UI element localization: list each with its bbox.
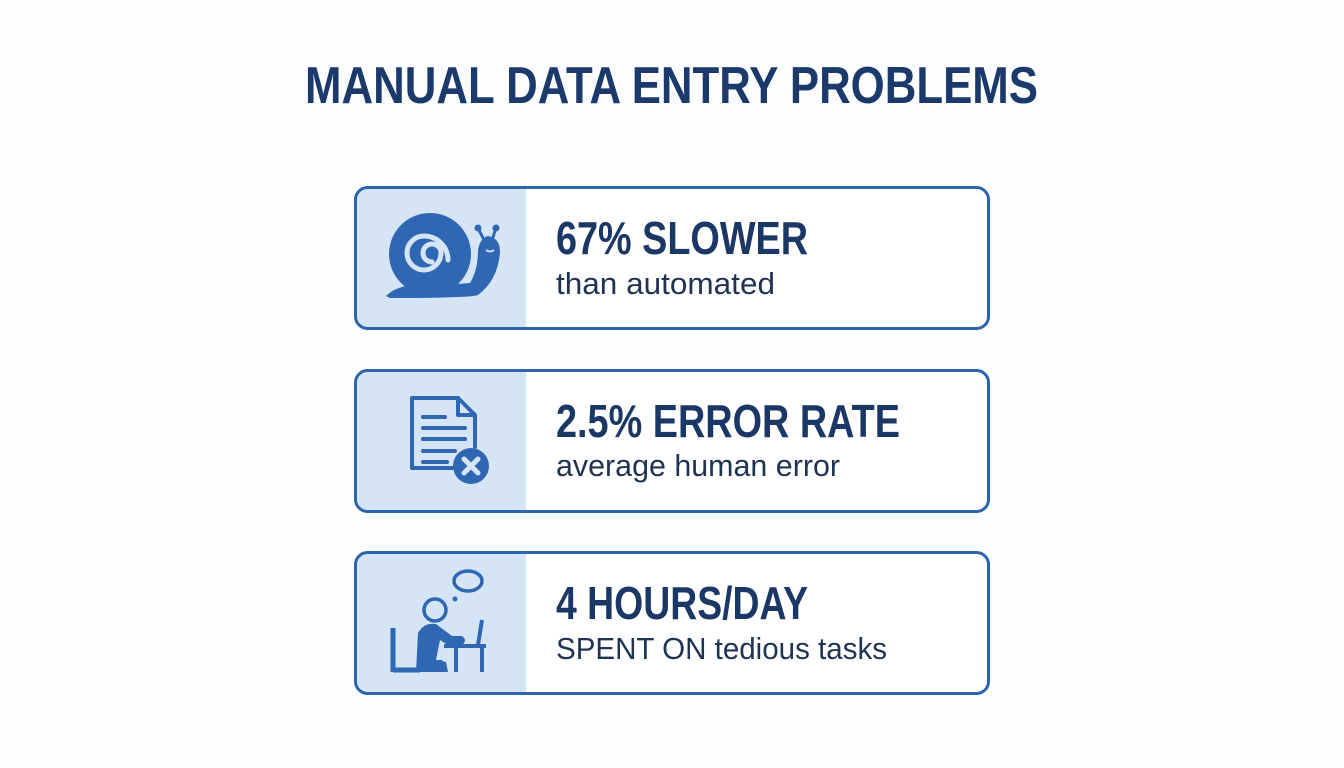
- text: spent on tedious tasks: SPENT ON tedious tasks: [556, 631, 887, 666]
- card: hours per day: [356, 552, 988, 694]
- icon: snail: [386, 213, 500, 298]
- text: 4 hours/day: 4 HOURS/DAY: [556, 577, 808, 629]
- card: error rate: [356, 370, 988, 512]
- text: 67% slower: 67% SLOWER: [556, 212, 808, 264]
- icon: tired person at desk: [393, 571, 486, 672]
- text: 2.5% error rate: 2.5% ERROR RATE: [556, 395, 900, 447]
- text: than automated: than automated: [556, 266, 775, 301]
- icon: document with x: [412, 398, 489, 484]
- title: MANUAL DATA ENTRY PROBLEMS: [305, 57, 1038, 115]
- card: slower: [356, 188, 988, 328]
- text: average human error: average human error: [556, 448, 840, 483]
